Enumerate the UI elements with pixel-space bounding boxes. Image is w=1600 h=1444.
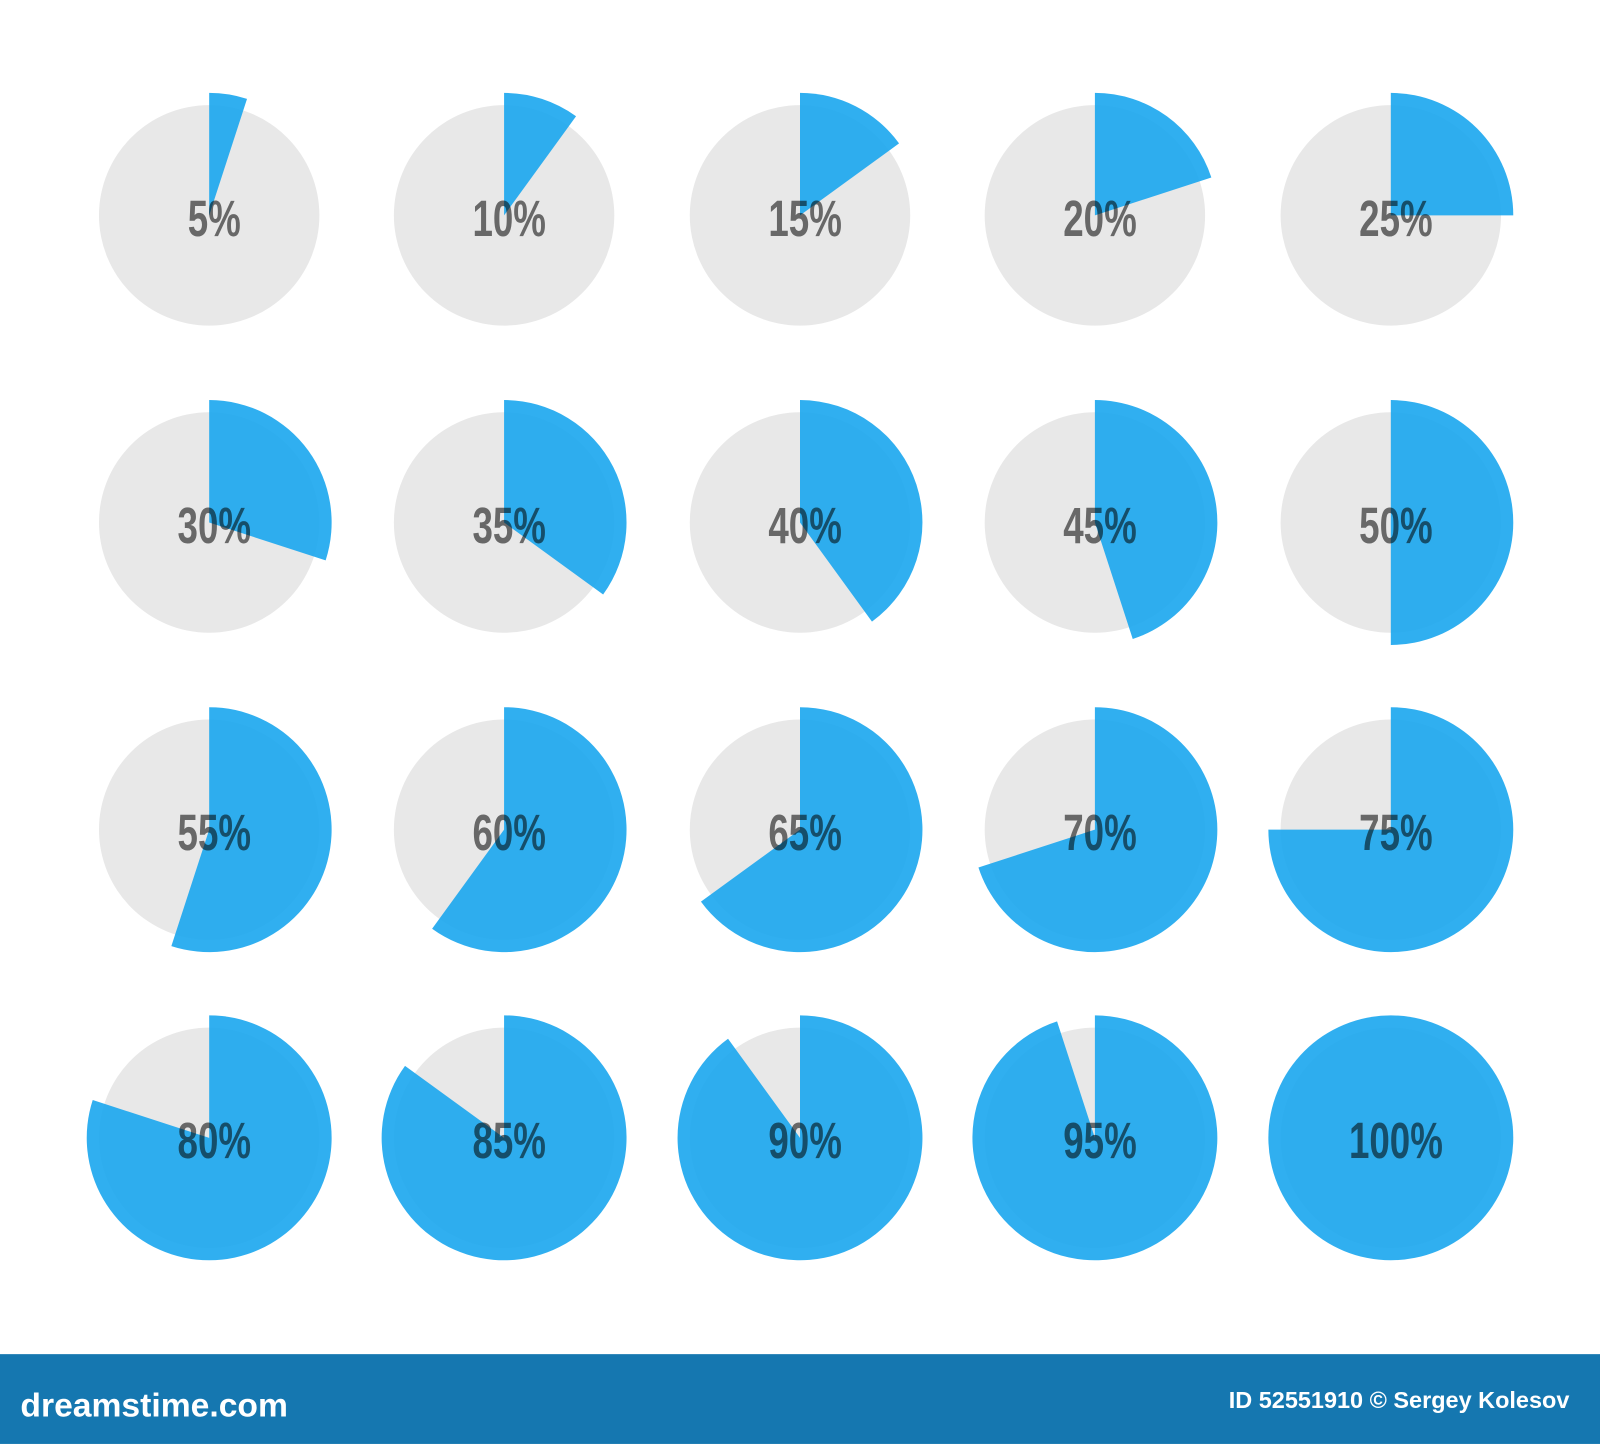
pie: 20%: [985, 93, 1211, 326]
pie: 90%: [678, 1015, 922, 1260]
pie: 15%: [690, 93, 910, 326]
pie: 45%: 45%: [1063, 498, 1137, 554]
pie: 95%: 95%: [1063, 1113, 1137, 1170]
pie: 50%: [1281, 400, 1513, 645]
pie: 20%: 20%: [1063, 191, 1137, 247]
pie: 30%: 30%: [178, 498, 251, 554]
pie: 85%: [382, 1015, 627, 1260]
pie: 100%: 100%: [1349, 1113, 1443, 1170]
footer: image credit: ID 52551910 © Sergey Kolesov: [1229, 1387, 1569, 1413]
pie: 40%: 40%: [768, 498, 842, 554]
pie: 25%: 25%: [1359, 191, 1433, 247]
pie: 90%: 90%: [768, 1113, 842, 1170]
pie: 75%: 75%: [1359, 805, 1433, 862]
pie: 60%: 60%: [472, 805, 546, 862]
pie: 5%: [99, 93, 319, 326]
pie: 10%: [394, 93, 614, 326]
pie: 55%: [99, 707, 332, 952]
pie: 85%: 85%: [472, 1113, 546, 1170]
pie: 35%: 35%: [472, 498, 546, 554]
footer bar: [0, 1354, 1600, 1444]
pie: 55%: 55%: [178, 805, 251, 862]
pie: 70%: 70%: [1063, 805, 1137, 862]
pie: 15%: 15%: [768, 191, 842, 247]
pie: 100%: [1268, 1015, 1513, 1260]
pie: 80%: 80%: [178, 1113, 251, 1170]
pie: 60%: [394, 707, 627, 952]
pie: 70%: [978, 707, 1217, 952]
pie: 5%: 5%: [188, 191, 241, 247]
pie: 35%: [394, 400, 627, 633]
pie: 45%: [985, 400, 1217, 639]
pie: 65%: 65%: [768, 805, 842, 862]
chart grid: [87, 93, 1513, 1260]
pie: 80%: [87, 1015, 332, 1260]
pie: 95%: [972, 1015, 1217, 1260]
pie: 30%: [99, 400, 332, 633]
pie: 50%: 50%: [1359, 498, 1433, 554]
pie: 65%: [690, 707, 922, 952]
footer: site name: dreamstime.com: [20, 1387, 288, 1424]
pie: 40%: [690, 400, 922, 633]
pie: 10%: 10%: [472, 191, 546, 247]
pie: 75%: [1268, 707, 1513, 952]
pie: 25%: [1281, 93, 1513, 326]
